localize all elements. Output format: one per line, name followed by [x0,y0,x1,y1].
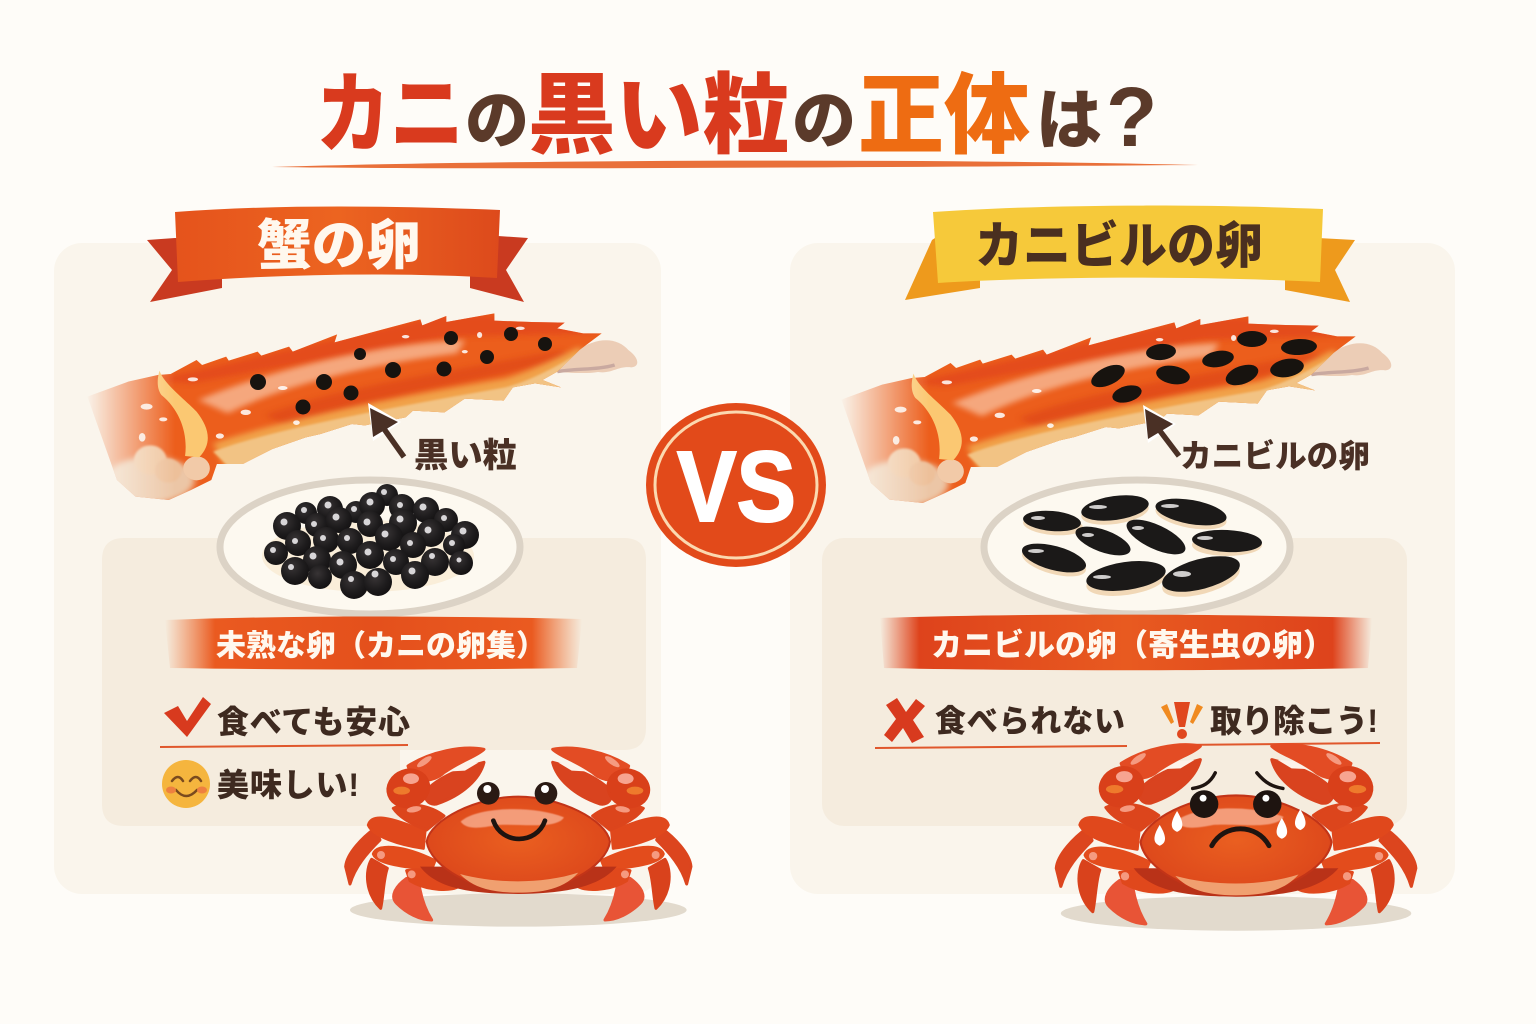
panel background [54,243,661,894]
arrow: black grain [368,403,404,457]
title [316,65,1157,165]
crab brows [1193,773,1283,788]
text: not edible: 食べられない [935,704,1125,739]
icon: smiley [162,760,210,808]
sub banner: parasite eggs [880,615,1372,670]
label: leech eggs: カニビルの卵 [1180,438,1370,474]
crab: sad [1056,745,1416,931]
sub banner: immature eggs [165,616,582,670]
label: black grain: 黒い粒 [414,437,517,475]
panel: crab eggs [54,206,691,927]
VS badge [646,403,826,567]
crab: happy [346,748,691,927]
crab frown [1212,829,1269,846]
inner panel [102,538,646,826]
ribbon: leech eggs [905,206,1355,302]
crab leg with black dots [89,313,638,500]
text: delicious: 美味しい! [217,767,359,803]
crab eyes [1190,790,1282,818]
sub banner: immature eggs: 未熟な卵（カニの卵集） [216,630,546,663]
VS badge: VS [677,431,796,543]
text: remove it: 取り除こう! [1210,703,1378,739]
crab tears [1154,809,1306,846]
underline [160,744,408,748]
underline [875,745,1127,749]
crab smile [493,821,545,839]
ribbon: crab eggs [147,206,528,302]
title: の [792,85,856,157]
inner panel [822,538,1407,826]
icon: exclamation [1161,702,1203,739]
crab eyes [477,782,557,805]
ribbon: leech eggs: カニビルの卵 [975,218,1263,274]
title: 黒い粒 [528,66,790,165]
title underline [272,161,1198,168]
title: 正体 [858,66,1030,165]
sub banner: parasite eggs: カニビルの卵（寄生虫の卵） [931,628,1334,663]
ribbon: crab eggs: 蟹の卵 [257,216,421,276]
panel background [790,243,1455,894]
title: の [465,85,529,157]
panel: leech eggs [790,206,1455,931]
title: ? [1106,70,1157,164]
title: カニ [316,65,464,164]
crab leg with leech eggs [843,316,1392,503]
arrow: leech eggs [1143,405,1179,456]
icon: cross [884,698,925,743]
text: safe to eat: 食べても安心 [217,704,410,740]
underline [1175,742,1380,746]
plate with leech eggs [984,480,1290,614]
plate with round eggs [220,480,520,614]
title: は [1036,83,1102,157]
icon: check mark [164,697,211,737]
